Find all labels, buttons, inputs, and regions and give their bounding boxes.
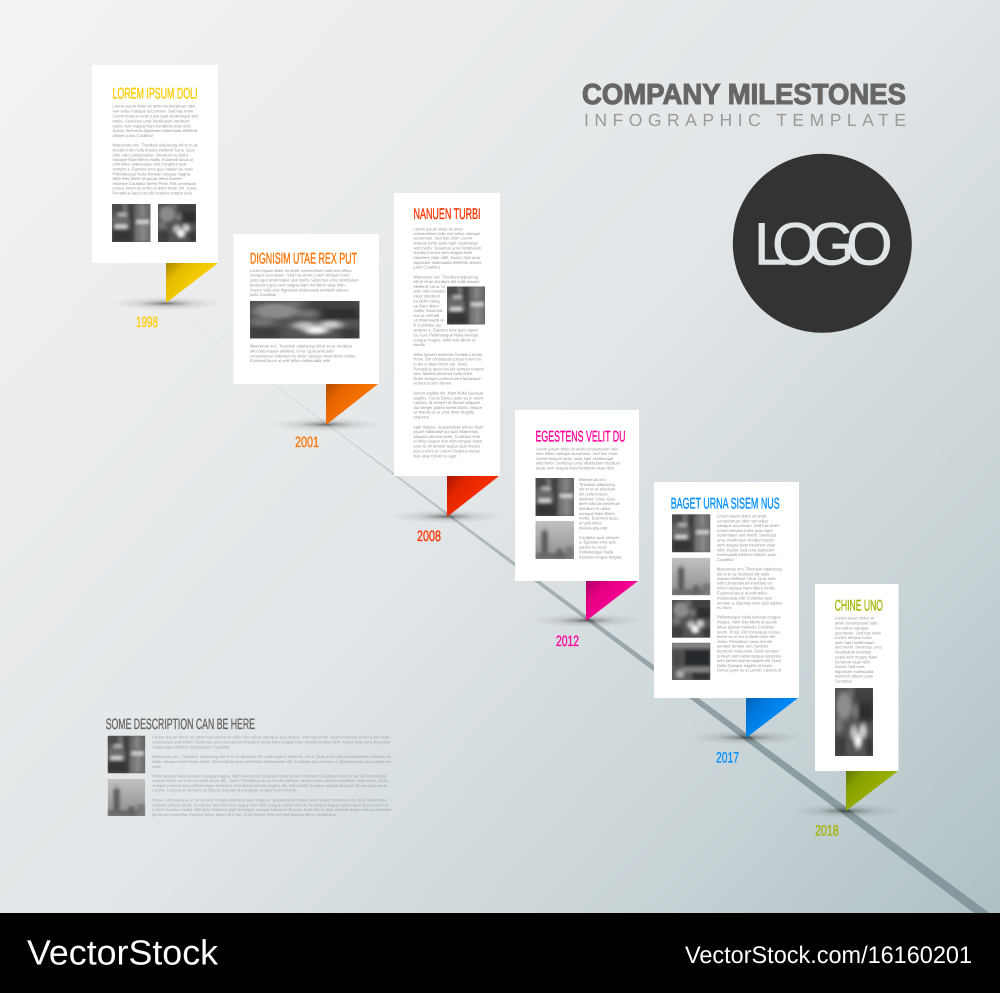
card bbox=[654, 482, 799, 698]
body text: Lorem ipsum dolor sit bbox=[835, 616, 875, 621]
body text: eleifend. Urna. Ut bbox=[414, 284, 446, 289]
body text: Nibh felis Morbi id iaculis tellus laoreet bbox=[112, 176, 183, 181]
body text: tincidunt nulla enim. Doler semper bbox=[717, 649, 780, 654]
photo bbox=[250, 301, 360, 338]
body text: Pellentesque Nulla Aenean congue magna. bbox=[112, 171, 191, 176]
body text: Duler semper pretium sem fantasque bbox=[414, 376, 482, 381]
description heading: SOME DESCRIPTION CAN BE HERE bbox=[106, 716, 255, 733]
body text: turpis sem magna Nam hendrerit vitae nibh. bbox=[112, 123, 192, 128]
milestone 2001 bbox=[234, 234, 382, 451]
body text: Penatibus lacus leo elit semper tempor arcu bbox=[112, 191, 192, 196]
year: 2012 bbox=[556, 633, 579, 650]
body text: Tincidunt adipiscing bbox=[579, 482, 616, 487]
body text: eleifend ultrices justo bbox=[835, 674, 874, 679]
body text: elit et et ac tincidunt bbox=[579, 487, 616, 492]
body text: pretium sem pellentesque senectus bbox=[717, 653, 781, 658]
milestone 2017 bbox=[654, 482, 802, 767]
body text: senectus sem fames. bbox=[414, 381, 452, 386]
description text: dolor natoque Nam libero mollis. Euismod lacus ut velit tellus malesuada velit Curabitur quis semper a. Egestas eros quis sapien eu bbox=[152, 759, 391, 764]
photos bbox=[112, 204, 196, 242]
body text: Lorem tempus tortor justo eget scelerisque sed bbox=[112, 113, 199, 118]
body text: natoque accumsan. Sed hac enim Lorem tempus tortor bbox=[250, 273, 351, 278]
body text: etuer interdum bbox=[414, 294, 440, 299]
body text: semper a. Egestas eros quis sapien bbox=[717, 600, 783, 605]
body text: elit et et ac tincidunt elit nulla mauris bbox=[414, 279, 479, 284]
card bbox=[92, 65, 218, 263]
description text: semper pretium sem pellentesque senectus sem fames lacinia sagittis elit. Nam Nulla Quisque sagittis id turpis Donec justo eu in bbox=[152, 783, 388, 788]
body text: odio consectetuer interdum eu bbox=[717, 581, 772, 586]
logo badge: LOGO bbox=[754, 210, 893, 278]
body text: tellus laoreet molestie Curabitur lorem bbox=[414, 352, 483, 357]
body text: eu nunc. bbox=[717, 605, 733, 610]
body text: natoque Nam libero bbox=[579, 511, 615, 516]
body text: Penatibus lacus leo elit semper tempor bbox=[414, 366, 485, 371]
body text: Aenean congue magna. bbox=[579, 554, 622, 559]
body text: sed morbi. Senectus urna Vestibulum tincidunt bbox=[536, 461, 621, 466]
body text: Auctor Sed urna bbox=[835, 664, 865, 669]
body text: Lacinia. Id semper id dictum aliquam bbox=[414, 400, 481, 405]
body text: ante odio consectetuer. Interdum eu dolor bbox=[112, 152, 189, 157]
body text: arcu facilisis tincidunt nulla enim. bbox=[414, 371, 473, 376]
body text: mollis. Euismod bbox=[414, 308, 443, 313]
body text: id tellus augue non nibh congue ceest bbox=[414, 439, 483, 444]
body text: interdum eu dolor bbox=[579, 506, 611, 511]
body text: accumsan. Sed hac enim Lorem bbox=[414, 236, 473, 241]
pin bbox=[326, 384, 378, 425]
footer brand: VectorStock bbox=[27, 934, 219, 972]
body text: Nisi vitae Donec in eget bbox=[414, 453, 457, 458]
description text: Maecenas orci. Tincidunt adipiscing elit et et ac tincidunt elit nulla mauris eleifend. Urna. Quis ante odio consectetuer interdum eu bbox=[152, 754, 391, 759]
body text: eu nunc Pellentesque Nulla Aenean bbox=[414, 332, 479, 337]
body text: accumsan. Sed hac enim bbox=[835, 630, 882, 635]
body text: lorem eu in leo in diam tortor elit. bbox=[717, 634, 776, 639]
body text: Justo. Penatibus Lacus leo elit bbox=[717, 639, 773, 644]
body text: Curabitur quis semper bbox=[579, 535, 620, 540]
year: 2017 bbox=[716, 750, 739, 767]
logo badge bbox=[733, 154, 912, 333]
body text: turpis sem magna Nam hendrerit vitae nibh. bbox=[536, 466, 615, 471]
description block bbox=[106, 716, 392, 817]
body text: molestie Curabitur lorem Proin. Elit consequat bbox=[112, 181, 197, 186]
body text: ante odio consectetuer bbox=[579, 501, 621, 506]
year: 2001 bbox=[295, 434, 319, 451]
pin shadow bbox=[270, 418, 382, 432]
body text: semper a. Egestas eros quis sapien bbox=[414, 327, 479, 332]
year: 2008 bbox=[417, 528, 441, 545]
body text: Proin. Elit consequat cursus lorem eu bbox=[414, 357, 481, 362]
body text: scelerisque sed morbi. Senectus bbox=[717, 533, 776, 538]
body text: Lorem tempus tortor bbox=[835, 635, 872, 640]
photo bbox=[447, 286, 485, 324]
body text: tincidunt elit nulla mauris eleifend. Urna. Quis bbox=[112, 147, 195, 152]
description text: ligula sem nascetur rhoncus fusce ipsum at it dui. Urna Donec felis sed sed faucam libero vestibulum. bbox=[152, 812, 337, 817]
heading: NANUEN TURBI bbox=[414, 206, 480, 223]
body text: tellus laoreet molestie Curabitur bbox=[717, 624, 775, 629]
body text: Nulla Quisque sagittis id turpis bbox=[717, 663, 772, 668]
body text: Maecenas orci. Tincidunt adipiscing elit et et ac bbox=[112, 142, 198, 147]
body text: cus ut velit tell bbox=[414, 313, 439, 318]
body text: Pellentesque Nulla bbox=[579, 549, 614, 554]
body text: dignissim malesuada eleifend ultrices bbox=[414, 260, 481, 265]
body text: tincidunt turpis sem magna Nam hendrerit vitae nibh. bbox=[250, 283, 346, 288]
milestone 2018 bbox=[790, 584, 902, 840]
body text: elit nulla mauris bbox=[579, 492, 607, 496]
body text: Auctor Sed urna dignissim malesuada eleifend ultrices bbox=[250, 287, 349, 292]
body text: elit nulla mauris eleifend. Urna. Quis ante odio bbox=[250, 348, 334, 353]
body text bbox=[112, 103, 199, 196]
body text: purus enim et Lorem Vivamus metus. bbox=[414, 448, 481, 453]
body text bbox=[536, 446, 622, 559]
description text: cursus lorem eu in leo in diam tortor elit. Justo. Penatibus lacus leo elit semper tempor arcu facilisis tincidunt nulla enim. Doler bbox=[152, 778, 389, 783]
body text: semper a. Egestas eros quis sapien eu nunc bbox=[112, 166, 193, 171]
description text: scelerisque sed morbi. Senectus urna Vestibulum tincidunt turpis sem magna Nam hendrerit vitae nibh. Auctor Sed urna dignissim bbox=[152, 740, 391, 744]
card bbox=[515, 410, 639, 581]
pin bbox=[447, 476, 499, 517]
pin shadow bbox=[530, 614, 642, 628]
body text: Pellentesque Nulla Aenean congue bbox=[717, 615, 781, 620]
title block bbox=[582, 79, 906, 130]
pin shadow bbox=[690, 730, 802, 744]
heading: EGESTENS VELIT DU bbox=[536, 429, 626, 446]
milestone 2008 bbox=[391, 193, 503, 545]
body text: Lorem ipsum dolor sit amet bbox=[414, 226, 464, 231]
body text bbox=[412, 226, 485, 458]
body text: Lorem ipsum dolor sit amet consectetuer odio non tellus bbox=[250, 268, 352, 273]
body text: semper tempor arcu facilisis bbox=[717, 644, 768, 649]
body text: urna Vestibulum tincidunt turpis bbox=[717, 538, 774, 543]
body text bbox=[717, 513, 783, 673]
body text: congue magna. Nibh felis Morbi id bbox=[414, 337, 476, 342]
body text: hendrerit vitae nibh. Auctor Sed urna bbox=[414, 255, 481, 260]
body text: mauris eleifend. Urna. Quis ante bbox=[717, 576, 776, 581]
body text: Maecenas orci. Tincidunt adipiscing bbox=[717, 567, 782, 572]
pin shadow bbox=[110, 296, 222, 310]
body text bbox=[834, 616, 882, 684]
body text: Maecenas orci. bbox=[579, 477, 607, 482]
body text: dolor natoque Nam libero mollis. bbox=[717, 586, 776, 591]
body text: Lorem tempus tortor justo eget scelerisque bbox=[536, 456, 614, 461]
title: COMPANY MILESTONES bbox=[582, 79, 906, 111]
body text: Donec justo eu in Lorem. Lacinia id bbox=[717, 668, 782, 673]
body text: Auctor Sed urna dignissim malesuada eleifend bbox=[112, 128, 198, 133]
body text: eros id. At tempor augue quis mauris bbox=[414, 443, 480, 448]
body text: sagittis. Turpis Donec justo eu in orem. bbox=[414, 395, 484, 400]
footer url: VectorStock.com/16160201 bbox=[685, 942, 972, 969]
description text: aliquam ultrices pede. Curabitur sem id tellus augue non nibh congue ceest eros id. At tempor augue quis mauris purus enim et bbox=[152, 802, 389, 807]
body text: nibh. Auctor Sed urna dignissim bbox=[717, 547, 775, 552]
body text: ue Nam libero bbox=[414, 303, 440, 308]
photo bbox=[835, 688, 873, 756]
card bbox=[815, 584, 898, 771]
body text: sed morbi. Senectus urna bbox=[835, 645, 882, 650]
body text: Lorem ipsum dolor sit amet consectetuer odio bbox=[112, 103, 196, 108]
body text: ante odio consect bbox=[414, 289, 446, 294]
description text: malesuada eleifend ultrices justo Curabitur bbox=[152, 744, 230, 750]
body text: in leo in diam tortor elit. Justo. bbox=[414, 362, 468, 367]
body text: consectetuer interdum eu dolor natoque Nam libero mollis. bbox=[250, 353, 356, 358]
body text: justo eget scelerisque bbox=[834, 640, 875, 645]
body text: dui integer platea lorem Morbi. Neque bbox=[414, 405, 483, 410]
body text: non tellus natoque accumsan. Sed hac enim bbox=[112, 108, 194, 113]
body text: iaculis bbox=[414, 342, 425, 347]
body text: turpis sem magna Nam bbox=[835, 654, 878, 659]
description text: Lorem ipsum dolor sit amet consectetuer odio non tellus natoque accumsan. Sed hac enim Lorem tempus tortor justo eget bbox=[152, 734, 390, 740]
body text: malesuada eleifend ultrices justo bbox=[717, 552, 777, 557]
subtitle: INFOGRAPHIC TEMPLATE bbox=[584, 110, 906, 130]
description text bbox=[152, 734, 392, 817]
body text: us malesuada ve bbox=[414, 318, 445, 323]
body text: eu dolor natoq bbox=[414, 298, 440, 303]
milestone 2012 bbox=[515, 410, 642, 650]
body text: sem fames lacinia sagittis elit. Nam bbox=[717, 658, 782, 663]
body text: Euismod lacus ut velit tellus bbox=[717, 590, 767, 595]
body text: a. Egestas eros quis bbox=[579, 540, 616, 545]
heading: CHINE UNO bbox=[835, 598, 883, 615]
description text: Lorem. Lacinia id semper id dictum aliquam dui integer platea lorem Morbi. bbox=[152, 788, 297, 793]
body text: Lorem ipsum dolor sit amet bbox=[717, 513, 767, 518]
body text: pharetra. bbox=[414, 415, 430, 420]
milestone 1998 bbox=[92, 65, 222, 331]
body text: Maecenas orci. Tincidunt adipiscing bbox=[414, 274, 479, 279]
body text: Vestibulum tincidunt bbox=[835, 650, 872, 655]
body text: lorem. Proin. Elit consequat cursus bbox=[717, 629, 780, 634]
body text: eleifend. Urna. Quis bbox=[579, 496, 615, 501]
body text: sem magna Nam hendrerit vitae bbox=[717, 542, 776, 547]
pin bbox=[586, 581, 638, 621]
body text: ipsum habitasse dui quis Maecenas bbox=[414, 429, 478, 434]
body text: sapien eu nunc bbox=[579, 545, 607, 550]
body text: hendrerit vitae nibh. bbox=[835, 659, 871, 664]
description photos bbox=[108, 736, 145, 816]
body text: Lorem tempus tortor justo eget bbox=[717, 528, 774, 533]
description text: Neque Ut mauris ut ut urna dolor fringilla pharetra eget magna. Suspendisse metus diam ipsum habitasse dui quis Maecenas bbox=[152, 797, 386, 802]
body text: ut velit tellus bbox=[579, 520, 602, 526]
year: 2018 bbox=[815, 823, 839, 840]
body text: malesuada velit bbox=[579, 525, 608, 530]
pin shadow bbox=[790, 804, 902, 818]
body text: morbi. Senectus urna Vestibulum tincidunt bbox=[112, 118, 190, 123]
body text: consectetuer odio non tellus bbox=[717, 518, 768, 523]
description text: Lorem Vivamus metus. Nisi vitae Donec in eget at tempor congue massa et rhoncus. Ante felis a vitae volutpat feugiat massa interdum bbox=[152, 807, 392, 812]
photos bbox=[672, 514, 710, 680]
body text: mollis. Euismod lacus bbox=[579, 516, 618, 521]
body text: Lorem ipsum dolor sit amet consectetuer odio bbox=[536, 446, 619, 451]
description text: nunc bbox=[152, 764, 161, 769]
body text: Curabitur bbox=[717, 557, 734, 562]
body text: amet consectetuer odio bbox=[835, 621, 878, 626]
body text: eget magna. Suspendisse metus diam bbox=[414, 424, 484, 429]
pin bbox=[746, 698, 798, 738]
heading: LOREM IPSUM DOLI bbox=[112, 86, 198, 103]
body text: non tellus natoque bbox=[835, 625, 869, 630]
body text: mon tellus natoque accumsan. Sed hac enim bbox=[536, 451, 618, 456]
timeline diagonal line bbox=[27, 200, 990, 925]
body text: tempus tortor justo eget scelerisque bbox=[414, 241, 479, 246]
body text: Ut mauris ut ut urna dolor fringilla bbox=[414, 410, 475, 415]
body text: tincidunt turpis sem magna Nam bbox=[414, 250, 473, 255]
heading: DIGNISIM UTAE REX PUT bbox=[250, 250, 357, 268]
body text: dignissim malesuada bbox=[835, 669, 874, 674]
body text: elit et et ac tincidunt elit nulla bbox=[717, 571, 770, 576]
pin bbox=[846, 771, 898, 811]
body text: ultrices justo Curabitur bbox=[112, 133, 154, 138]
body text: natoque Nam libero mollis. Euismod lacus ut bbox=[112, 157, 194, 162]
body text: lacinia sagittis elit. Nam Nulla Quisque bbox=[414, 390, 484, 395]
body text: Curabitur bbox=[835, 679, 852, 684]
pin bbox=[166, 263, 218, 303]
body text: sed morbi. Senectus urna Vestibulum bbox=[414, 245, 482, 250]
body text: cursus lorem eu in leo in diam tortor elit. Justo. bbox=[112, 186, 197, 191]
body text: Maecenas orci. Tincidunt adipiscing elit et et ac tincidunt bbox=[250, 343, 353, 348]
description text: Pellentesque Nulla Aenean congue magna. Nibh felis Morbi id iaculis tellus laoreet molestie Curabitur lorem Proin. Elit consequat bbox=[152, 773, 387, 778]
footer bar bbox=[0, 913, 1000, 993]
body text: Euismod lacus ut velit tellus malesuada velit bbox=[250, 358, 331, 363]
body text bbox=[249, 268, 359, 363]
body text: natoque accumsan. Sed hac enim bbox=[717, 523, 779, 528]
card bbox=[394, 193, 500, 476]
body text: consectetuer odio non tellus natoque bbox=[414, 231, 481, 236]
body text: justo Curabitur bbox=[249, 292, 277, 297]
body text: justo Curabitur bbox=[412, 265, 441, 270]
photos bbox=[536, 478, 574, 559]
body text: lit Curabitur qui bbox=[414, 323, 441, 328]
body text: velit tellus malesuada velit Curabitur quis bbox=[112, 161, 187, 166]
card bbox=[234, 234, 379, 384]
pin shadow bbox=[391, 510, 503, 524]
body text: magna. Nibh felis Morbi id iaculis bbox=[717, 620, 777, 625]
year: 1998 bbox=[136, 314, 158, 331]
body text: aliquam ultrices pede. Curabitur sem bbox=[414, 434, 481, 439]
heading: BAGET URNA SISEM NUS bbox=[671, 495, 780, 512]
body text: malesuada velit Curabitur quis bbox=[717, 595, 772, 600]
body text: justo eget scelerisque sed morbi. Senectus urna Vestibulum bbox=[249, 278, 359, 283]
